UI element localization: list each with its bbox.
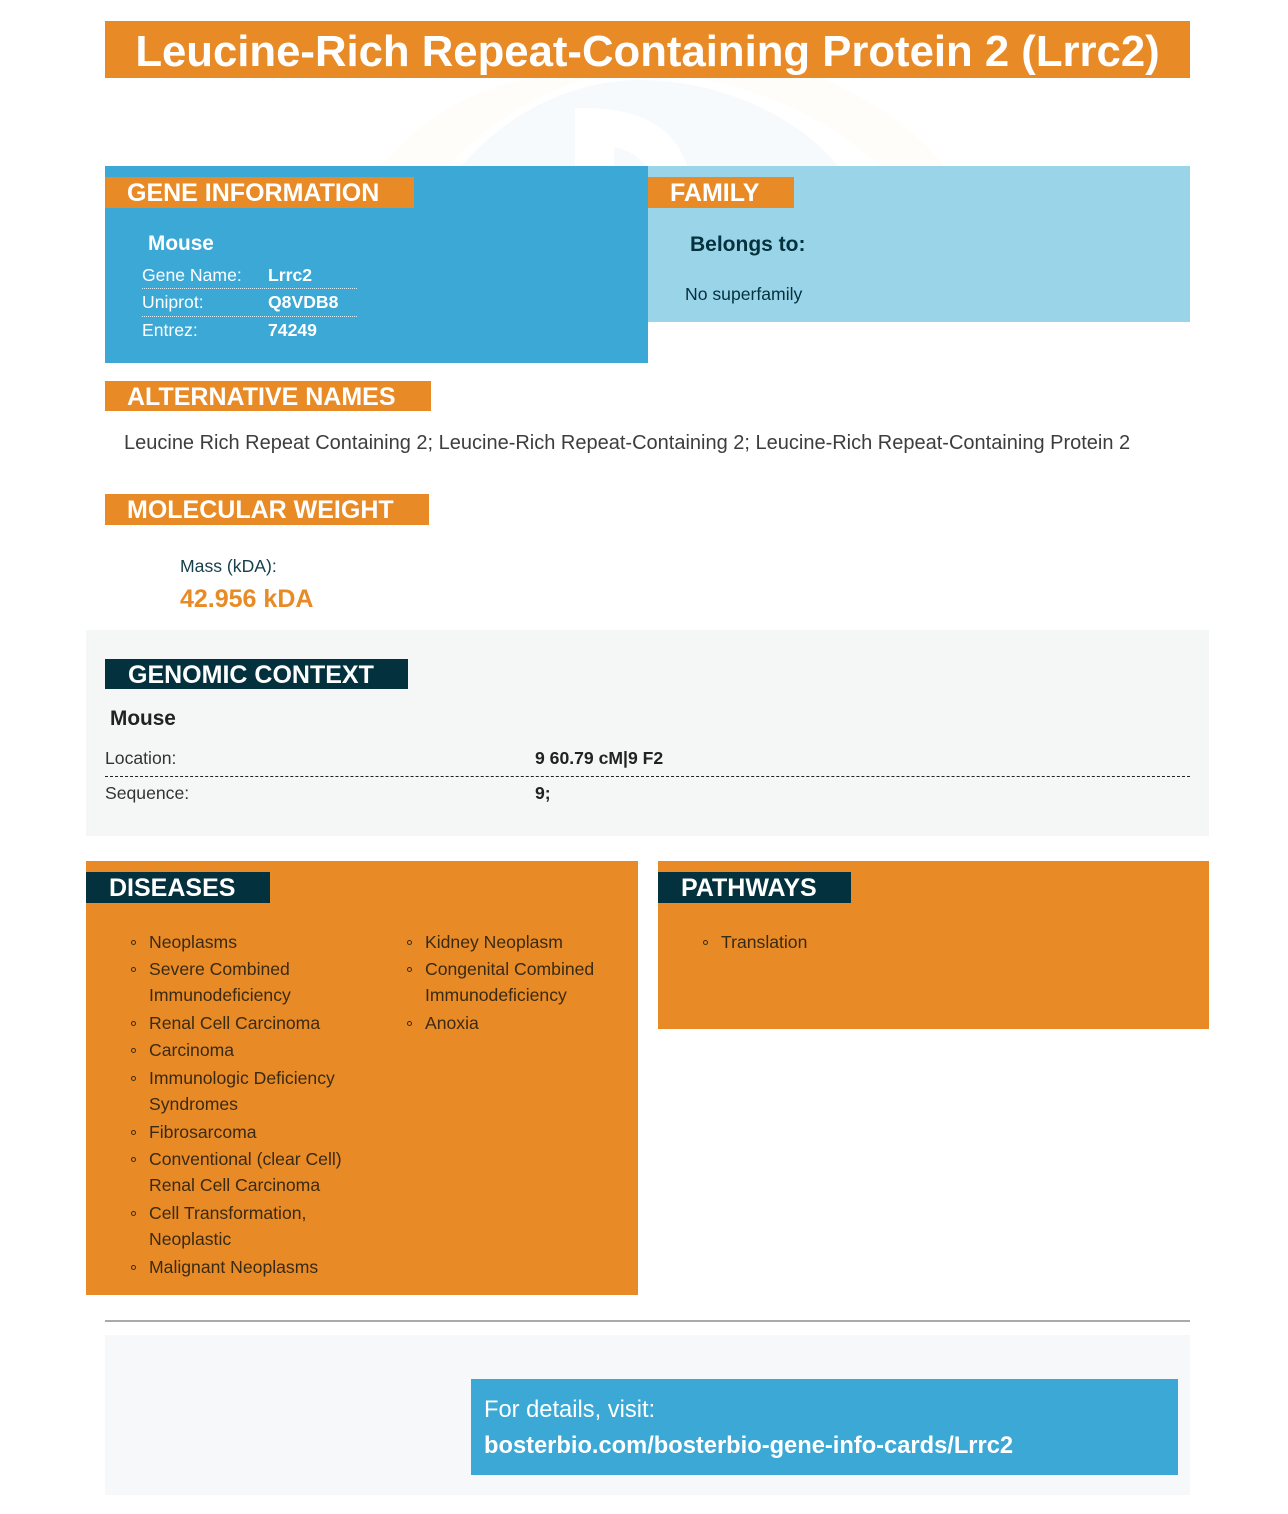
gene info table: Entrez:: [142, 320, 198, 340]
mass value: 42.956 kDA: [180, 585, 313, 613]
sequence row: Sequence:: [105, 783, 189, 803]
disease list: column one: Neoplasms: [149, 932, 237, 952]
species label: Mouse: [148, 232, 214, 255]
panel: pathways: [658, 861, 1209, 1029]
species label: Mouse: [110, 707, 176, 730]
disease list: column one: Syndromes: [149, 1094, 238, 1114]
gene info table: Lrrc2: [268, 265, 312, 285]
callout: details link: For details, visit:: [484, 1397, 655, 1423]
heading: family: FAMILY: [670, 179, 759, 207]
pathway list: Translation: [721, 932, 807, 952]
heading: diseases: [86, 872, 270, 903]
heading: alternative names: ALTERNATIVE NAMES: [127, 383, 396, 411]
panel: genomic context: [86, 630, 1209, 836]
location row: 9 60.79 cM|9 F2: [535, 748, 663, 768]
callout: details link: bosterbio.com/bosterbio-gene-info-cards/Lrrc2: [484, 1433, 1013, 1459]
disease list: column one: Immunologic Deficiency: [149, 1068, 335, 1088]
disease list: column one: Immunodeficiency: [149, 985, 291, 1005]
heading: pathways: [658, 872, 851, 903]
panel: family: [648, 166, 1190, 322]
panel: footer: [105, 1335, 1190, 1495]
disease list: column one: Carcinoma: [149, 1040, 234, 1060]
disease list: column one: Fibrosarcoma: [149, 1122, 257, 1142]
location row: Location:: [105, 748, 176, 768]
disease list: column one: Severe Combined: [149, 959, 290, 979]
sequence row: [105, 783, 551, 803]
heading: genomic context: GENOMIC CONTEXT: [128, 661, 374, 689]
panel: gene information: [105, 166, 648, 363]
gene info table: [142, 265, 357, 340]
mass label: Mass (kDA):: [180, 556, 277, 576]
gene info table: Q8VDB8: [268, 292, 338, 312]
disease list: column two: Congenital Combined: [425, 959, 594, 979]
disease list: column one: Neoplastic: [149, 1229, 231, 1249]
disease list: column one: Conventional (clear Cell): [149, 1149, 342, 1169]
footer rule: [105, 1320, 1190, 1322]
disease list: column two: [407, 932, 594, 1033]
location row: [105, 746, 1190, 777]
disease list: column two: Kidney Neoplasm: [425, 932, 563, 952]
gene info table: Uniprot:: [142, 292, 204, 312]
heading: molecular weight: MOLECULAR WEIGHT: [127, 496, 394, 524]
callout: details link: [471, 1379, 1178, 1475]
family value: No superfamily: [685, 284, 802, 304]
alternative names text: Leucine Rich Repeat Containing 2; Leucine-Rich Repeat-Containing 2; Leucine-Rich Repeat-Containing Protein 2: [124, 432, 1130, 454]
disease list: column one: Renal Cell Carcinoma: [149, 1175, 320, 1195]
disease list: column one: Malignant Neoplasms: [149, 1257, 318, 1277]
panel: diseases: [86, 861, 638, 1295]
heading: family: [648, 177, 794, 208]
disease list: column two: Immunodeficiency: [425, 985, 567, 1005]
family label: Belongs to:: [690, 233, 806, 256]
disease list: column one: [131, 932, 342, 1277]
heading: diseases: DISEASES: [109, 874, 235, 902]
gene info table: Gene Name:: [142, 265, 242, 285]
watermark logo: [462, 80, 838, 166]
heading: pathways: PATHWAYS: [681, 874, 817, 902]
disease list: column two: Anoxia: [425, 1013, 479, 1033]
title: Leucine-Rich Repeat-Containing Protein 2 (Lrrc2): [135, 27, 1160, 76]
heading: gene information: GENE INFORMATION: [127, 179, 379, 207]
disease list: column one: Renal Cell Carcinoma: [149, 1013, 320, 1033]
disease list: column one: Cell Transformation,: [149, 1203, 306, 1223]
sequence row: 9;: [535, 783, 551, 803]
gene info table: 74249: [268, 320, 317, 340]
